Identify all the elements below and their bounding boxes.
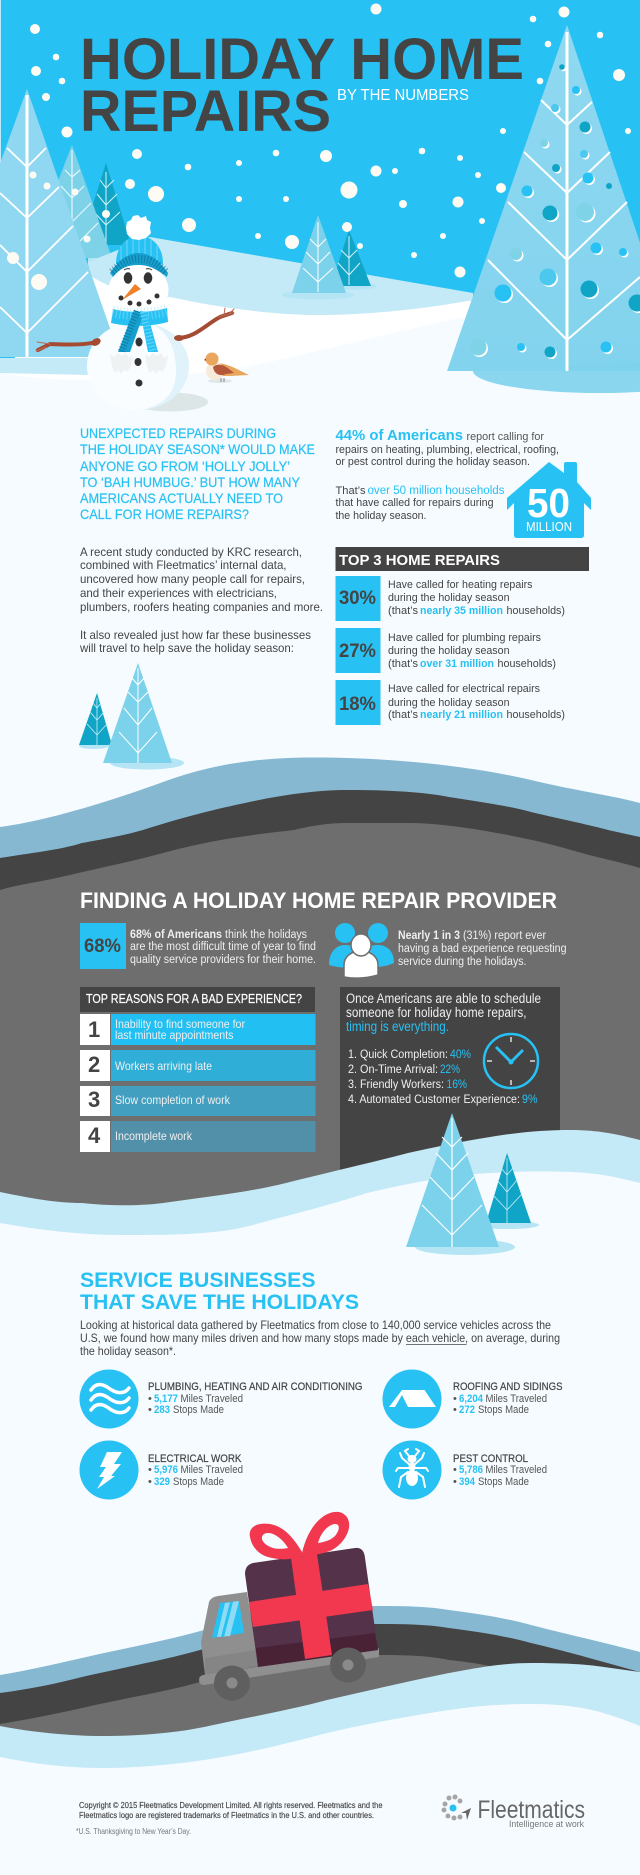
service: electrical work: 329 <box>154 1476 170 1488</box>
row: heating: (that’s <box>388 605 418 617</box>
falling snow <box>7 4 631 290</box>
ranked list <box>348 1049 538 1106</box>
trees on snow wave <box>406 1113 539 1255</box>
icon: clock <box>484 1034 538 1088</box>
intro body text <box>79 545 323 655</box>
ranked list: 40% <box>450 1049 471 1061</box>
service: pest control: • <box>453 1476 457 1488</box>
title: REPAIRS <box>80 79 331 144</box>
statistic: 50 million households: That’s <box>336 485 366 497</box>
icon: house 50 million: 50 <box>527 480 570 526</box>
service: roofing and sidings: Miles Traveled <box>486 1393 547 1405</box>
service description: Looking at historical data gathered by Fleetmatics from close to 140,000 service vehicles across the <box>80 1318 551 1332</box>
row: plumbing: Have called for plumbing repairs <box>388 632 541 644</box>
Fleetmatics logo: Intelligence at work <box>509 1819 584 1830</box>
ranked list: 9% <box>522 1094 538 1106</box>
section heading: service businesses: SERVICE BUSINESSES <box>80 1269 316 1292</box>
copyright text <box>79 1800 383 1820</box>
service: plumbing, heating and air conditioning: Stops Made <box>173 1404 224 1416</box>
light snow band left <box>0 358 88 375</box>
service: pest control: Miles Traveled <box>486 1464 547 1476</box>
mittens <box>110 353 168 374</box>
icon: house 50 million <box>507 462 591 538</box>
statistic: nearly 1 in 3 <box>398 930 566 968</box>
service: pest control: 5,786 <box>459 1464 483 1476</box>
icon: house 50 million: MILLION <box>526 520 572 534</box>
reason 2 <box>80 1050 316 1081</box>
heading bar <box>336 547 589 571</box>
panel intro text: timing is everything. <box>346 1019 449 1034</box>
reason 1: 1 <box>88 1017 100 1042</box>
service: plumbing, heating and air conditioning: • <box>148 1393 152 1405</box>
ranked list: 4. Automated Customer Experience: <box>348 1094 520 1106</box>
background snow hill <box>88 237 473 316</box>
section heading: service businesses <box>80 1269 359 1314</box>
service: roofing and sidings: • <box>453 1393 457 1405</box>
statistic: 68%: are the most difficult time of year to find <box>130 941 316 953</box>
wave bands <box>0 757 640 1250</box>
copyright text: Copyright © 2015 Fleetmatics Development Limited. All rights reserved. Fleetmatics and the <box>79 1800 383 1810</box>
ranked list: 22% <box>440 1064 460 1076</box>
title: HOLIDAY HOME <box>80 27 524 92</box>
road wave bands <box>0 1606 640 1768</box>
row: heating: households) <box>506 605 565 617</box>
reason 3: 3 <box>88 1087 100 1112</box>
centre tree dark <box>337 231 377 290</box>
face <box>118 269 160 306</box>
statistic: nearly 1 in 3: (31%) report ever <box>463 930 546 942</box>
service: roofing and sidings: • <box>453 1404 457 1416</box>
statistic: 44% of Americans <box>336 428 559 468</box>
intro heading: ANYONE GO FROM ‘HOLLY JOLLY’ <box>80 458 290 474</box>
panel: timing is everything <box>340 987 560 1177</box>
service: pest control <box>382 1440 547 1500</box>
footnote: *U.S. Thanksgiving to New Year’s Day. <box>76 1827 191 1836</box>
icon: roof <box>382 1370 442 1428</box>
heading bar: TOP 3 HOME REPAIRS <box>339 553 500 569</box>
panel: top reasons for a bad experience <box>80 987 316 1152</box>
list heading <box>80 987 315 1012</box>
gift bow <box>250 1512 349 1559</box>
service: electrical work: Miles Traveled <box>180 1464 243 1476</box>
hat <box>110 215 168 277</box>
list heading: TOP REASONS FOR A BAD EXPERIENCE? <box>86 992 302 1006</box>
reason 2: Workers arriving late <box>115 1059 212 1073</box>
panel intro text: Once Americans are able to schedule <box>346 991 541 1006</box>
tree ornaments <box>470 64 640 359</box>
gift box <box>245 1548 378 1667</box>
truck chassis <box>199 1648 379 1685</box>
copyright text: Fleetmatics logo are registered trademarks of Fleetmatics in the U.S. and other countries. <box>79 1810 374 1820</box>
service: roofing and sidings: 272 <box>459 1404 475 1416</box>
Fleetmatics logo: Fleetmatics <box>478 1796 585 1824</box>
statistic: 44% of Americans: repairs on heating, plumbing, electrical, roofing, <box>336 444 559 456</box>
ranked list: 2. On-Time Arrival: <box>348 1064 438 1076</box>
row: plumbing: during the holiday season <box>388 645 510 657</box>
service: pest control: Stops Made <box>478 1476 529 1488</box>
service: plumbing, heating and air conditioning <box>80 1370 362 1428</box>
statistic: 44% of Americans: or pest control during the holiday season. <box>336 456 530 468</box>
row: plumbing: 27% <box>339 641 376 662</box>
panel intro text: someone for holiday home repairs, <box>346 1005 526 1020</box>
statistic: 50 million households: that have called for repairs during <box>336 497 494 509</box>
statistic: 68% <box>80 923 316 969</box>
row: electrical: 18% <box>339 694 376 715</box>
reason 4: 4 <box>88 1123 101 1148</box>
service: roofing and sidings: 6,204 <box>459 1393 484 1405</box>
service: electrical work: Stops Made <box>173 1476 224 1488</box>
row: plumbing: (that’s <box>388 658 418 670</box>
left foreground tree <box>0 89 120 357</box>
statistic: 68%: 68% <box>84 936 121 957</box>
row: electrical: nearly 21 million <box>420 709 503 721</box>
buttons <box>134 338 142 386</box>
title <box>80 27 524 144</box>
white snow slope <box>0 277 472 380</box>
intro heading: CALL FOR HOME REPAIRS? <box>80 506 249 522</box>
row: heating: Have called for heating repairs <box>388 579 533 591</box>
intro body text: It also revealed just how far these businesses <box>80 628 311 642</box>
icon: ant <box>382 1440 442 1500</box>
intro body text: combined with Fleetmatics’ internal data, <box>80 558 286 572</box>
row: heating: during the holiday season <box>388 592 510 604</box>
reason 2: 2 <box>88 1052 100 1077</box>
service: pest control: • <box>453 1464 457 1476</box>
reason 3: Slow completion of work <box>115 1093 231 1107</box>
title: BY THE NUMBERS <box>337 87 469 104</box>
statistic: nearly 1 in 3: service during the holidays. <box>398 956 526 968</box>
service: plumbing, heating and air conditioning: • <box>148 1404 152 1416</box>
row: electrical: households) <box>506 709 565 721</box>
row: heating: nearly 35 million <box>420 605 503 617</box>
section heading: service businesses: THAT SAVE THE HOLIDAYS <box>80 1291 359 1314</box>
section heading: finding a provider: FINDING A HOLIDAY HOME REPAIR PROVIDER <box>80 888 557 913</box>
service: plumbing, heating and air conditioning: 5,177 <box>154 1393 178 1405</box>
service: plumbing, heating and air conditioning: PLUMBING, HEATING AND AIR CONDITIONING <box>148 1381 362 1393</box>
ranked list: 16% <box>446 1079 467 1091</box>
intro heading: UNEXPECTED REPAIRS DURING <box>80 425 276 441</box>
service description: U.S, we found how many miles driven and how many stops made by each vehicle, on average, during <box>80 1331 560 1345</box>
statistic: nearly 1 in 3: Nearly 1 in 3 <box>398 930 460 942</box>
intro heading: THE HOLIDAY SEASON* WOULD MAKE <box>80 441 315 457</box>
intro body text: A recent study conducted by KRC research, <box>80 545 302 559</box>
intro body text: will travel to help save the holiday season: <box>79 641 294 655</box>
service: roofing and sidings <box>382 1370 562 1428</box>
intro heading: TO ‘BAH HUMBUG.’ BUT HOW MANY <box>80 474 301 490</box>
intro body text: and their experiences with electricians, <box>80 586 277 600</box>
statistic: 50 million households <box>336 485 505 522</box>
centre tree light <box>282 215 354 300</box>
service: roofing and sidings: ROOFING AND SIDINGS <box>453 1381 562 1393</box>
row: electrical: during the holiday season <box>388 697 510 709</box>
row: electrical: Have called for electrical repairs <box>388 683 540 695</box>
row: plumbing: over 31 million <box>420 658 494 670</box>
arms <box>36 308 234 351</box>
statistic: 50 million households: over 50 million households <box>368 485 505 497</box>
service: pest control: PEST CONTROL <box>453 1453 528 1465</box>
hero winter scene <box>0 0 640 420</box>
truck cab <box>201 1592 259 1675</box>
service: plumbing, heating and air conditioning: 283 <box>154 1404 170 1416</box>
intro heading <box>80 425 315 522</box>
ranked list: 3. Friendly Workers: <box>348 1079 444 1091</box>
dark tree behind snowman <box>93 164 129 245</box>
row: electrical <box>336 680 565 725</box>
icon: people <box>329 923 394 978</box>
icon: lightning bolt <box>80 1440 138 1500</box>
service: roofing and sidings: Stops Made <box>478 1404 529 1416</box>
large ornament tree <box>447 25 640 393</box>
hand stubs <box>92 335 184 346</box>
statistic: 44% of Americans: report calling for <box>466 431 544 443</box>
service description: the holiday season*. <box>80 1344 176 1358</box>
reason 1: Inability to find someone for <box>115 1017 245 1031</box>
reason 4: Incomplete work <box>115 1129 193 1143</box>
service: plumbing, heating and air conditioning: Miles Traveled <box>180 1393 243 1405</box>
service: pest control: 394 <box>459 1476 476 1488</box>
scarf <box>111 308 168 352</box>
service: electrical work: 5,976 <box>154 1464 178 1476</box>
panel: top 3 home repairs <box>336 547 589 725</box>
reason 1 <box>80 1014 316 1045</box>
reason 3 <box>80 1086 316 1116</box>
row: electrical: (that’s <box>388 709 418 721</box>
service: electrical work: • <box>148 1464 152 1476</box>
statistic: 68%: quality service providers for their home. <box>130 954 316 966</box>
snow wave <box>0 1130 640 1300</box>
row: heating: 30% <box>339 588 376 609</box>
intro heading: AMERICANS ACTUALLY NEED TO <box>80 490 283 506</box>
statistic: 68%: think the holidays <box>225 929 307 941</box>
statistic: nearly 1 in 3: having a bad experience requesting <box>398 943 566 955</box>
row: plumbing: households) <box>498 658 556 670</box>
Fleetmatics logo <box>442 1794 585 1830</box>
service: electrical work: ELECTRICAL WORK <box>148 1453 242 1465</box>
service: electrical work: • <box>148 1476 152 1488</box>
snowman <box>36 215 234 412</box>
statistic: 44% of Americans: 44% of Americans <box>336 428 463 444</box>
bird <box>204 352 249 383</box>
intro trees <box>79 663 184 770</box>
row: plumbing <box>336 628 556 673</box>
statistic: 50 million households: the holiday season. <box>336 510 426 522</box>
ranked list: 1. Quick Completion: <box>348 1049 448 1061</box>
service: electrical work <box>80 1440 243 1500</box>
intro body text: uncovered how many people call for repairs, <box>80 572 305 586</box>
wheels <box>214 1648 366 1700</box>
statistic: 68%: 68% of Americans <box>130 929 222 941</box>
intro body text: plumbers, roofers heating companies and more. <box>80 600 323 614</box>
reason 4 <box>80 1121 316 1152</box>
snow ground <box>0 317 640 420</box>
truck with gift <box>199 1512 379 1700</box>
row: heating <box>336 576 565 621</box>
reason 1: last minute appointments <box>115 1028 234 1042</box>
icon: water waves <box>80 1370 138 1428</box>
panel intro text <box>346 991 541 1034</box>
pale tree behind snowman <box>58 145 110 265</box>
service description <box>80 1318 560 1358</box>
